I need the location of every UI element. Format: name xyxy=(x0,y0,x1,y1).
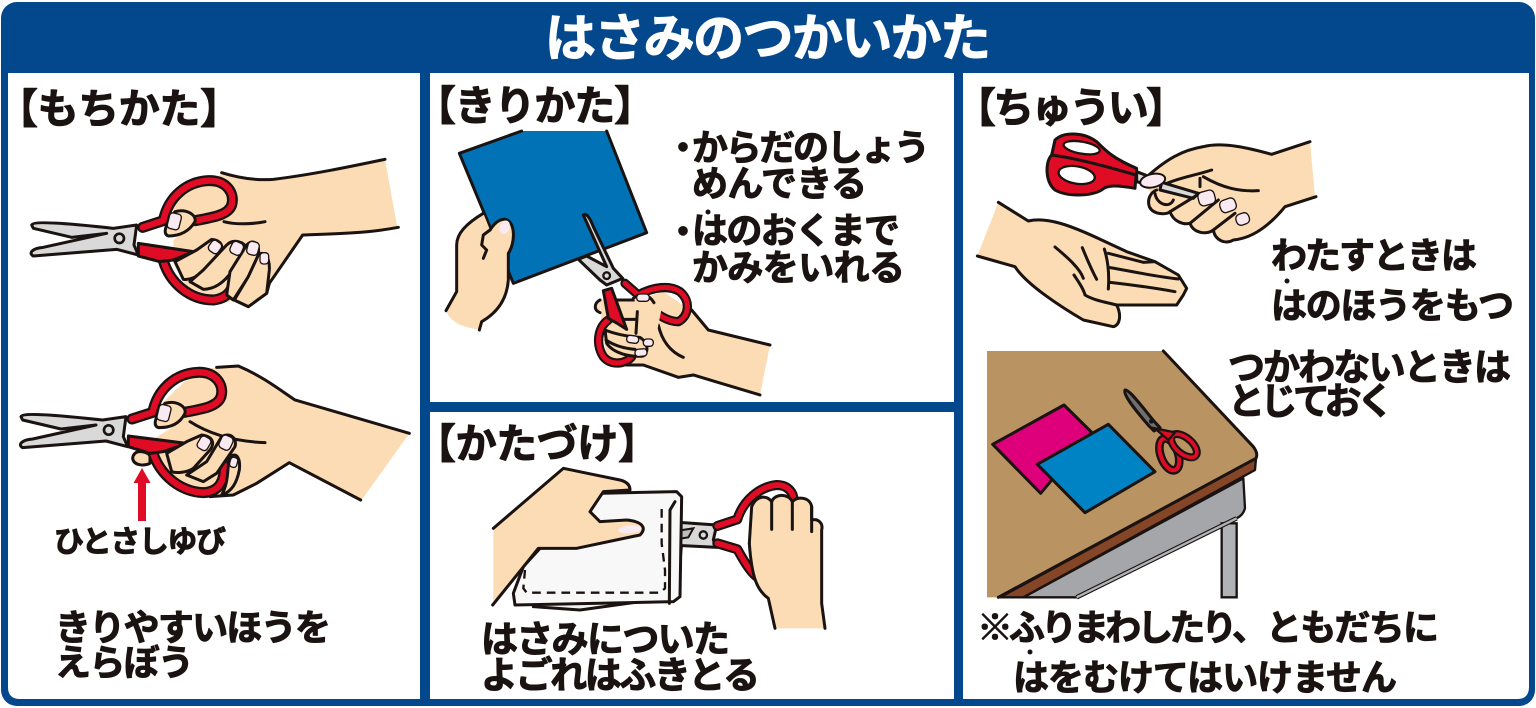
text: when handing over: はのほうをもつ xyxy=(1271,285,1514,326)
panel: how to hold xyxy=(0,73,420,699)
illustration: hand holding scissors, bottom xyxy=(20,366,409,500)
text: when handing over xyxy=(1271,235,1514,326)
title: はさみのつかいかた xyxy=(545,10,991,67)
illustration: handing over scissors xyxy=(977,134,1316,327)
heading: cleaning up: 【かたづけ】 xyxy=(415,421,659,467)
text: close when not in use xyxy=(1228,347,1511,422)
bullet list: cutting tips xyxy=(666,127,930,288)
heading: cautions: 【ちゅうい】 xyxy=(955,85,1187,131)
text: close when not in use: つかわないときは xyxy=(1228,347,1511,388)
text: choose the easy way xyxy=(55,607,331,683)
heading: how to hold: 【もちかた】 xyxy=(0,86,241,132)
bullet list: cutting tips: ・ xyxy=(666,130,700,168)
bullet list: cutting tips: からだのしょう xyxy=(692,127,930,168)
text: choose the easy way: きりやすいほうを xyxy=(55,607,331,648)
panel: how to cut xyxy=(415,73,954,402)
text: wipe off dirt: はさみについた xyxy=(481,619,730,660)
arrow pointing to index finger xyxy=(134,468,150,521)
illustration: wiping scissors with cloth xyxy=(493,468,825,628)
label: index finger: ひとさしゆび xyxy=(54,526,226,559)
text: wipe off dirt xyxy=(481,619,760,696)
text: choose the easy way: えらぼう xyxy=(55,642,194,683)
bullet list: cutting tips: かみをいれる xyxy=(692,247,905,288)
text: wipe off dirt: よごれはふきとる xyxy=(481,655,760,696)
panel: cautions xyxy=(955,73,1529,699)
text: warning note: ※ふりまわしたり、 xyxy=(977,607,1268,648)
bullet list: cutting tips: はのおくまで xyxy=(692,210,900,251)
panel: cleaning up xyxy=(415,412,954,699)
bullet list: cutting tips: ・ xyxy=(666,214,700,252)
text: when handing over: わたすときは xyxy=(1271,235,1477,276)
text: close when not in use: とじておく xyxy=(1228,381,1394,422)
text: warning note xyxy=(977,607,1439,698)
illustration: scissors closed on desk xyxy=(987,351,1257,597)
illustration: cutting blue paper xyxy=(446,131,770,395)
illustration: hand holding scissors, top xyxy=(31,159,398,307)
text: warning note: はをむけてはいけません xyxy=(1013,657,1397,698)
heading: how to cut: 【きりかた】 xyxy=(415,83,655,129)
bullet list: cutting tips: めんできる xyxy=(692,163,867,204)
text: warning note: ともだちに xyxy=(1266,607,1439,648)
